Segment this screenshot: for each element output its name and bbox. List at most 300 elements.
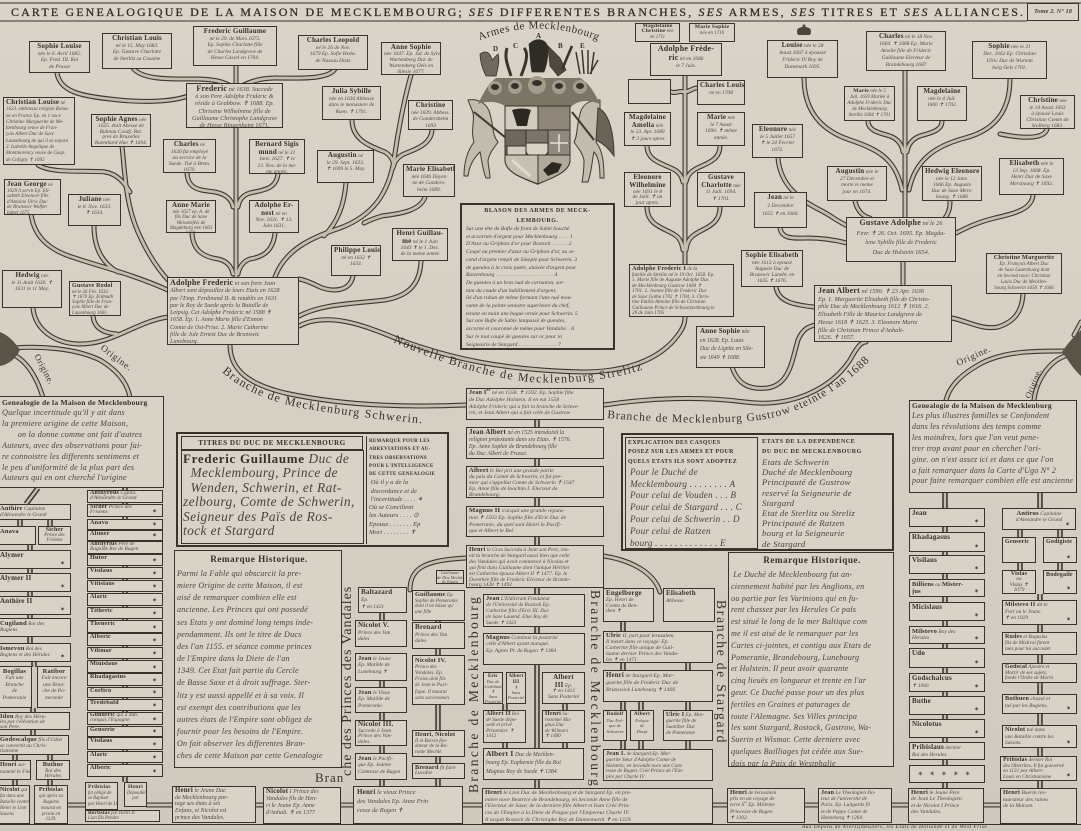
box: Adolphe Frederic: Leipsig. Cet Adolphe Frederic né 1588 ✝ xyxy=(170,310,271,316)
box: Augustin: jour en 1674. xyxy=(843,189,871,195)
box: Henri le Gras: est Catherine épouse Albert II ✝ 1477. Ep. le xyxy=(469,571,567,577)
blason text: et accornée d'argent pour Mecklenbourg . . . . 1 xyxy=(466,234,573,240)
box: Eleonore Wilhelmine: née 1691 le 8 xyxy=(633,189,662,195)
box: Godescalque: tianisme xyxy=(0,748,18,754)
box: Milstevo II: Fort ou le Jeune xyxy=(1005,609,1040,615)
box: Sophie: Sophie née le 21 xyxy=(988,42,1031,50)
box: Visilaus xyxy=(87,567,163,579)
box: Frederic Guillaume: né le 29. de Mars 1675. xyxy=(209,36,261,42)
box: Gustave Adolphe: Fevr. ✝ 26. Oct. 1695. Ep. Magda- xyxy=(857,230,945,237)
box: Christine: le 14 Aoust 1663 xyxy=(1029,105,1066,111)
box: Vitislaus xyxy=(87,580,163,592)
box: Sicher xyxy=(38,526,71,545)
box: Adolphe Frederic: Albert sont dépouillez de leurs Etats en 1628 xyxy=(170,288,280,294)
box: Anthyrius: Anthyrius Pere de xyxy=(90,541,135,547)
box: Nicolot: Bataille contre xyxy=(0,800,29,805)
panel: explication des casques xyxy=(621,433,894,551)
panel text: gine. on n'est assez ici et dans ce que l'on xyxy=(912,455,1054,464)
box: Albert II: 1412 xyxy=(486,733,496,739)
box: Henri: Depouillé xyxy=(127,791,146,796)
etats column: Principauté de Ratzen xyxy=(762,518,844,528)
box: Sophie Agnes: Sophie Agnes née xyxy=(95,115,147,123)
box: Nicolot: Henri le Lion xyxy=(0,806,26,811)
box: Miuislaus xyxy=(87,660,163,673)
box: Nicolot IV xyxy=(412,655,465,705)
box: Guillaume: dont il ne laisse qu' xyxy=(415,604,454,609)
box: Vislas: Vislas xyxy=(1011,571,1027,577)
box: Christine Marguerite: de Saxe Lauenbourg dont xyxy=(998,268,1050,273)
box: Anne Marie: Anne Marie xyxy=(172,201,210,209)
box: Henri le Jeune: Henri le Jeune Pere xyxy=(911,789,960,796)
box: Sophie xyxy=(972,41,1047,79)
box: Eleonore: ✝ le 24 Fevrier xyxy=(760,140,794,146)
box: Louise: Danemark 1695. xyxy=(784,64,821,70)
abbreviations: Où se Concilient xyxy=(369,504,413,511)
box: Sophie: berg Oels 1701. xyxy=(992,65,1027,71)
box: Henri le Lion: miere noce Beatrice de Brandebourg, en Seconde Anne fille de xyxy=(485,797,628,803)
box: Adolphe Frederic: Comte de Ost-Frise. 2. Marie Catherine xyxy=(170,325,268,331)
box: Hedwig Eleonore: Hedwig Eleonore xyxy=(925,167,979,175)
box: Alymer II: ✶ xyxy=(60,583,65,590)
blason heading: LEMBOURG. xyxy=(516,218,559,224)
box: Henri le Jeune: Henri le Jeune Duc xyxy=(175,787,226,794)
box: Brenard fut: Brenard fit faire xyxy=(415,764,456,771)
box: Marie Sophie: née en 1710 xyxy=(700,31,724,36)
box: Rudolf: que de xyxy=(609,723,621,728)
box: Jean l'Eldictrant xyxy=(483,594,585,627)
box: Nicolot IV: Vandales. Ep. xyxy=(415,670,443,676)
box: Magdelaine Christine: Magdelaine xyxy=(643,23,672,29)
box: Jean l'Eldictrant: de Saxe Lauend. Elue Roy de xyxy=(486,614,548,620)
box: Albert xyxy=(630,710,654,741)
right genealogy column A xyxy=(908,508,985,823)
titres text: tock et Stargard xyxy=(183,523,275,538)
box: Magnus: celle d'Albert ayant manqué. xyxy=(486,641,549,647)
box: Albert III: III Ep. xyxy=(555,681,572,689)
box: Pribislas: en 1131 par Albert- xyxy=(1003,768,1044,774)
box: Julia Sybille: née en 1636 Abbesse xyxy=(329,96,374,102)
box: Hedwig: 1631 le 11 May. xyxy=(15,286,49,292)
box: Godschalcus xyxy=(909,673,985,692)
empty box xyxy=(628,79,671,104)
box: Anthire: d'Alexandre le Grand xyxy=(0,512,46,518)
box: Jean l'Eldictrant: de l'Université de Rostock Ep. xyxy=(486,602,550,608)
box: Jean: Jean le Pacifi- xyxy=(358,755,393,762)
panel text: Auteurs, avec des observations pour fai- xyxy=(2,441,142,450)
box: Eric: Eric xyxy=(488,674,498,679)
box: Henri le Lion: Henri le Lion Duc de Mecklenbourg et de Stargard Ep. en pre- xyxy=(485,789,631,796)
box: Magnus II: Pomeranie, du quel sont Henri le Pacifi- xyxy=(469,522,562,528)
box: Pribislas: Pribislas xyxy=(39,787,63,793)
casques column: Pour celui de Schwerin . . D xyxy=(630,514,740,524)
box: Guillaume: une fille xyxy=(415,610,431,615)
box: Jean Albert: phle Duc de Mecklenbourg 1612 ✝ 1616. 2. xyxy=(818,303,929,310)
box: Albert I xyxy=(483,748,584,780)
box: Nicolot: Nicolot tué dans xyxy=(1005,726,1045,733)
box: Gustave Rodolphe: né le 26 Fév. 1632. xyxy=(72,290,109,295)
box: Albert le Bel: du pais du Comté de Schwerin, et fut pre- xyxy=(469,474,562,480)
box: Christine xyxy=(408,100,453,130)
box: Pribislas: Pribislas xyxy=(88,784,111,790)
box: Sophie: Dec. 1662 Ep. Christian xyxy=(983,51,1036,57)
box: Christine: de Gandersheim xyxy=(413,116,448,122)
abbreviations: l'incertitude . . . . ✶ xyxy=(371,496,423,503)
box: Jean George: 1629 il servit Ep. Eli- xyxy=(7,189,50,194)
coat of arms: D xyxy=(493,45,498,53)
box: Eric: Posterité xyxy=(485,699,501,704)
box: Henri de Ierusalem: Princesse de Rugen xyxy=(730,809,773,815)
right genealogy column B xyxy=(1000,508,1077,824)
box: Nicolot xyxy=(0,785,30,824)
box: Visilaus: ✶ xyxy=(974,565,979,572)
box: Nicolot IV: fique. Il mourut xyxy=(415,689,447,695)
box: Tredebald: ✶ xyxy=(152,702,157,709)
box: Albert le Bel: Ep. Anne fille de Ioachim I. Electeur de xyxy=(469,486,558,492)
box: Pribislas: se Baptiser xyxy=(88,796,109,801)
etats column: de Stargard xyxy=(762,539,805,549)
box: Philippe Louis: Philippe Louis xyxy=(334,246,380,254)
box: Albert: de xyxy=(640,723,644,728)
box: Pribislas: fut obligé de xyxy=(88,791,111,796)
box: Pribislas: Pribislas dernier Roi xyxy=(1003,757,1052,763)
box: Vislas: ou xyxy=(1016,576,1022,582)
box: Christian Louis: Ep. Gustave Charlotte xyxy=(113,49,161,55)
box: Ulric I: Suanibor Duc xyxy=(666,724,695,730)
box: Genserie: Genserie xyxy=(90,726,115,733)
publisher line: Aux Depens de Nierzijmeuners, les Etats de Hollande et de West Frise xyxy=(802,824,987,830)
box: Rhadagasus: ✶ xyxy=(974,543,979,550)
box: Augustin: le 29. Sept. 1633. xyxy=(327,160,364,166)
box: Sophie Louise: Sophie Louise xyxy=(37,42,82,50)
small box above Guillaume xyxy=(436,570,464,584)
box: Henri Nicolot xyxy=(412,730,465,757)
box: Hedwig Eleonore: Duc de Saxe Mers- xyxy=(931,188,973,194)
mantling and helmets xyxy=(478,76,600,108)
box: Jean I de Stargard: Holstein; en Seconde noce une Com- xyxy=(606,763,683,769)
box: Jean: ✶ xyxy=(974,518,979,525)
box: Nicolot III: Prince des Van- xyxy=(358,733,392,739)
plate number box: Tome 2. N° 18 xyxy=(1034,8,1072,15)
titres text: Mecklembourg, Prince de xyxy=(190,465,338,480)
box: Albert II: de Suede dépo- xyxy=(486,717,517,723)
remark text: de l'Empire dans la Diete de l'an xyxy=(177,654,290,663)
box: Vilimar: ✶ xyxy=(152,650,157,657)
box: Godigiste: ✶ xyxy=(1066,554,1071,561)
box: Vislas: 1079 xyxy=(1014,587,1024,593)
box: Eric: ✝ xyxy=(491,689,495,694)
box: Anne Sophie: Wurtemberg Oels en xyxy=(389,63,433,69)
remark text: quelques Bailliages fut cédée aux Sue- xyxy=(731,747,863,756)
remark text: pendamment. Ils ont le titre de Ducs xyxy=(177,630,301,639)
box: Genserie xyxy=(87,726,163,737)
box: Ratibor: Fait encore xyxy=(42,675,66,681)
box: Albert III: Sans Posterité xyxy=(548,694,579,700)
etats column: DU DUC DE MECKLENBOURG xyxy=(762,448,862,454)
box: Bodegaile: Bodegaile xyxy=(1046,572,1073,578)
box: Idon: Idon Roy des Héru- xyxy=(0,713,46,720)
box: Rudolf: Rudolf xyxy=(606,711,624,717)
box: Adolphe Frederic Strelitz: le 7 Juin. xyxy=(676,63,696,69)
box: Jean le Vieux: Ep. Matilde de xyxy=(358,696,390,702)
box: Genseric xyxy=(1002,537,1036,563)
box: Hedwig Eleonore xyxy=(922,166,982,201)
box: Henri Nicolot: dateur de la Ba- xyxy=(415,744,448,749)
remark text: ancienne. Les Princes qui ont possedé xyxy=(177,605,308,614)
box: Adolphe Ernest: nest né en xyxy=(261,209,287,217)
box: Augustin: morte le meme xyxy=(841,182,873,188)
box: Magdelaine: Magdelaine xyxy=(924,87,960,95)
box: Buthe: ✶ xyxy=(974,706,979,713)
box: Marie: année. xyxy=(714,135,728,141)
box: Cugiland: Cugiland Roi des xyxy=(0,620,44,627)
box: Vislas: Vislas ✝ xyxy=(1010,582,1028,588)
box: Henri Buerin: taurateur des ruines xyxy=(1003,797,1048,803)
box: Hedwig Eleonore: 1666 Ep. Auguste xyxy=(933,182,971,188)
box: Jean xyxy=(909,508,985,527)
box: Magnus: Magnus Continue la posterité xyxy=(486,634,558,641)
box: Hedwig Eleonore: bourg. ✝ 1686 xyxy=(936,194,968,200)
box: Charles Louis: Charles Louis xyxy=(700,81,744,89)
remark text: ou partie par les Varinions qui en fu- xyxy=(731,594,858,603)
box: Magdelaine Amelia: Magdelaine xyxy=(629,113,666,121)
box: Henri le vieux xyxy=(353,786,463,824)
box: Christine: née 1639. Abbess. xyxy=(411,110,450,116)
box: Henri le Gras xyxy=(466,545,604,588)
box: Nicolotus: Nicolotus xyxy=(912,720,942,728)
box: Henri Guillaume: Henri Guillau- xyxy=(397,229,443,237)
box: Pribislaus xyxy=(909,742,985,760)
box: Juliane: ✝ 1634. xyxy=(86,210,104,216)
box: Hedwig xyxy=(2,270,62,308)
box: Tredebald: Tredebald xyxy=(90,699,119,706)
box: Gustave Charlotte xyxy=(697,172,745,207)
box: Henri le Gras: des Vandales qui avoit commencé à Nicolas et xyxy=(469,559,569,565)
box: Alimer: ✶ xyxy=(152,532,157,539)
box: Henri le vieux: cesse de Rugen ✝ xyxy=(357,807,403,814)
box: Milstevo II: ✶ xyxy=(1066,616,1071,623)
box: Adolphe Frederic I xyxy=(629,264,734,317)
box: Philippe Louis xyxy=(331,245,381,276)
etats column: Stargard xyxy=(762,498,794,508)
box: Pribislaus: Pribislaus dernier xyxy=(912,743,961,751)
box: Jean: Ep. Matilde de xyxy=(358,662,390,668)
etats column xyxy=(762,439,862,549)
box: Buthue xyxy=(36,760,70,780)
box: Vilimar: Vilimar xyxy=(90,647,112,654)
box: Engelberge: Ep. Henri de xyxy=(606,597,634,603)
box: Adolphe Frederic Strelitz: Adolphe Frède- xyxy=(658,44,714,53)
box: Jean Albert: fille de Christian Prince d'Anhalt- xyxy=(818,327,904,334)
box: Frederic: à son Pere Adolphe Frideric & xyxy=(195,93,274,100)
abbreviations: REMARQUE POUR LES xyxy=(369,439,430,444)
box: Visilaus xyxy=(909,555,985,574)
abbreviations xyxy=(366,436,447,544)
arms heading: Armes de Mecklenbourg xyxy=(480,22,600,42)
panel text xyxy=(2,408,142,482)
box: Godscal: fonde l'Ordre de Morin xyxy=(1005,675,1053,681)
box: Jean I de Stargard xyxy=(603,749,713,781)
box: Henri xyxy=(542,710,585,743)
box: Eleonore xyxy=(752,124,803,158)
box: Christine: à épousé Louis xyxy=(1031,111,1064,117)
box: Genserie: ✶ xyxy=(152,728,157,735)
box: Sophie Elisabeth: née 1613 à epousé xyxy=(752,260,792,266)
box: Juliane: le 8. Nov. 1633. xyxy=(78,204,111,210)
box: Marie xyxy=(697,112,745,146)
box: Henri Guillaume: 1643 ✝ le 1. Dec. xyxy=(401,245,439,251)
box: Bogillas xyxy=(0,666,32,708)
box: Eleonore: le 5 Juillet 1657 xyxy=(760,134,795,140)
box: Jean l'Eldictrant: Suede ✝ 1423 xyxy=(486,620,516,626)
box: Henri le Lion: l'Electeur de Saxe; de la derniere fille Albert et Ioan Créé Prin- xyxy=(485,803,630,809)
panel text: pour faire remarquer combien elle est ancienne xyxy=(912,476,1073,485)
panel text: Quelque incertitude qu'il y ait dans xyxy=(2,408,125,417)
box: Udo: Udo xyxy=(912,649,925,657)
blason text: De gueules à un bras nud de carnation, sor- xyxy=(466,280,565,286)
box: Adolphe Frederic: Adolphe Frederic et son frere Jean xyxy=(170,278,275,287)
box: Elisabeth: Henri Duc de Saxe xyxy=(1011,174,1052,180)
box: Anne Marie: fils Duc de Saxe xyxy=(175,215,207,220)
box: Albert le Bel: Albert le Bel prit une grande partie xyxy=(469,467,554,474)
box: Juliane: Juliane née xyxy=(78,195,111,203)
box: Nicolot I xyxy=(263,787,341,824)
box: Gustave Rodolphe: çois Albert Duc de xyxy=(72,305,108,310)
box: Albert III: ✝ en 1412 xyxy=(552,688,575,694)
abbreviations: TRES OBSERVATIONS xyxy=(369,456,427,461)
box: Udo xyxy=(909,648,985,668)
coat of arms xyxy=(464,22,614,185)
remark heading: Remarque Historique. xyxy=(763,555,861,565)
box: Anne Marie xyxy=(166,200,216,233)
box: Anava: ✶ xyxy=(152,521,157,528)
box: Henri le vieux: des Vandales Ep. Anne Prin xyxy=(357,798,428,805)
box: Marie Elisabeth: heim 1689. xyxy=(417,187,441,193)
box: Eleonore Wilhelmine: Wilhelmine xyxy=(629,181,666,189)
box: Sophie Elisabeth: 1635 ✝ 1676. xyxy=(757,278,787,284)
box: Idon: les par l'élévation de xyxy=(0,719,45,725)
box: Hedwig Eleonore: née le 12 Janv. xyxy=(936,176,968,182)
box: Frederic xyxy=(186,83,283,128)
box: Henri xyxy=(0,760,31,780)
box: Gunderic: Gunderic qui a dab. xyxy=(90,712,138,718)
box: Jean I xyxy=(466,388,604,420)
box: Gustave Rodolphe: Sophie fille de Fran- xyxy=(72,300,113,305)
abbreviations: Où il y a de la xyxy=(371,479,408,486)
box: Anthire II: ✶ xyxy=(60,606,65,613)
origin and branch labels: Origine. xyxy=(32,352,57,386)
box: Ulric I: Ulric I Ep. Mar- xyxy=(666,712,704,718)
box: Henri le Jeune: Enfans, et Nicolot est xyxy=(175,808,226,814)
box: Charles Louis: né en 1708 xyxy=(709,90,733,96)
box: Henri: gnus Duc xyxy=(545,722,564,728)
box: Buthe xyxy=(909,696,985,715)
box: Sophie Agnes: Rutenhard élue ✝ 1694. xyxy=(95,140,147,146)
box: Henri de Stargard: guerite fille de Frederic Duc de xyxy=(606,680,678,686)
box: Jean Albert: Elisabeth Fille de Maurice Landgrave de xyxy=(818,311,922,318)
box: Billiens: ✶ xyxy=(974,588,979,595)
box: Hutor xyxy=(87,554,163,566)
box: Titheric: Titheric xyxy=(90,607,113,614)
box: Marie: Strelitz 1684 ✝ 1701 xyxy=(849,113,890,118)
box: Henri de Ierusalem xyxy=(727,788,805,823)
box: Sicher: ✶ xyxy=(152,508,157,515)
box: Jean I: de Duc Adolphe Holstein. Il en eut 1558 xyxy=(469,397,559,403)
box: Eric: Sans xyxy=(489,694,497,699)
remark text: fournir pour les besoins de l'Empire. xyxy=(177,727,303,736)
box: Adolphe Frederic I: de Mecklenbourg Gustrow 1684 ✝ xyxy=(632,284,702,288)
box: Magdelaine Amelia xyxy=(624,112,671,146)
box: Rhadagasus xyxy=(909,532,985,552)
remark text xyxy=(731,570,871,767)
etats column: Etat de Sterlitz ou Streliz xyxy=(762,508,855,518)
box: Nicolot V: Nicolot V. xyxy=(358,621,389,629)
box: Adolphe Frederic Strelitz xyxy=(650,43,722,76)
box: Louise xyxy=(767,40,838,78)
box: Sophie Elisabeth: Sophie Elisabeth xyxy=(745,251,799,259)
box: Baltazard xyxy=(358,587,407,613)
box: Henri le Lion xyxy=(482,788,713,824)
blason heading: BLASON DES ARMES DE MECK- xyxy=(484,208,591,214)
box: Charles Leopold xyxy=(298,35,368,70)
box: Guillaume: Sophie de Pomeranie xyxy=(415,599,458,604)
remark text: On fait observer les differentes Bran- xyxy=(177,739,305,748)
box: Eleonore Wilhelmine: jour apres. xyxy=(636,200,659,206)
box: Milstevo: ✶ xyxy=(974,635,979,642)
box: Milstevo: Milstevo Roy des xyxy=(912,628,955,635)
box: Christian Louise: ne en France Ep. en 1 noce xyxy=(6,114,61,119)
box: Adolphe Frederic: 1658. Ep. 1. Anne Marie fille d'Ennon xyxy=(170,317,263,323)
box: Nicolot III: dales. xyxy=(358,739,371,745)
box: Milstevo xyxy=(909,626,985,644)
box: Nicolot: une Bataille contre les xyxy=(1005,734,1053,740)
box: Charles: 1670. xyxy=(183,167,196,173)
box: Vitislaus: Vitislaus xyxy=(90,580,115,587)
box: Antirius: d'Alexandre le Grand xyxy=(1016,517,1062,523)
box: Billiens: Billiens ou Mister- xyxy=(912,581,963,588)
box: Anne Marie: Weissenfels de xyxy=(177,220,205,226)
box: Magnus II xyxy=(466,506,604,537)
casques column: Pour celui de Stargard . . . C xyxy=(630,502,742,512)
box: Pribislaus: Roi des Herules xyxy=(912,752,946,758)
box: Marie: 1690. ✝ même xyxy=(705,128,737,134)
box: Micislaus: ✶ xyxy=(974,612,979,619)
box: Jean I: rin, et Jean Albert qui a fait celle de Gustrow xyxy=(469,410,570,416)
box: Charles Leopold: de Nassau Dietz xyxy=(315,58,351,64)
box: Albert III: Albert xyxy=(553,673,574,681)
box: Jean xyxy=(355,653,407,681)
vertical label: Branche de Mecklenbourg right: Branche de Mecklenbourg xyxy=(588,590,603,788)
panel text: dans les révolutions des temps comme xyxy=(912,422,1041,431)
box: Billiens: jus xyxy=(912,588,921,595)
coat of arms: B xyxy=(558,42,563,50)
box: Charles: 1664. ✝ 1688 Ep. Marie xyxy=(879,41,933,47)
box: Charles: Amelie fille de Frideric xyxy=(881,48,931,54)
box: Rudes: fils de Mistivoi furent xyxy=(1005,640,1049,646)
box: Jean Albert xyxy=(814,285,952,342)
box: Adolphe Frederic: par l'Emp. Ferdinand II. & retablis en 1631 xyxy=(170,296,277,302)
box: Jean: Lunebourg ✝ xyxy=(358,669,387,675)
title: CARTE GENEALOGIQUE DE LA MAISON DE MECKLEMBOURG; SES DIFFERENTES BRANCHES, SES ARMES, SES TITRES ET SES ALLIANCES. xyxy=(11,5,1023,19)
box: Marie: Juil. 1659 Mariée à xyxy=(850,95,889,100)
box: Engelberge xyxy=(603,588,654,622)
box: Albert I: bourg Ep. Euphemie fille du Roi xyxy=(486,760,561,766)
remark text: fertiles en Graines et paturages de xyxy=(731,700,850,709)
box: Charles: Guillaume Electeur de xyxy=(882,55,930,61)
blason text: tant du coude d'un habillement d'argent, xyxy=(466,288,556,294)
box: Engelberge: Engelberge xyxy=(606,589,642,597)
box: Bertislas: Bertislas par Henri le xyxy=(88,810,135,816)
box: Alaric xyxy=(87,751,163,763)
